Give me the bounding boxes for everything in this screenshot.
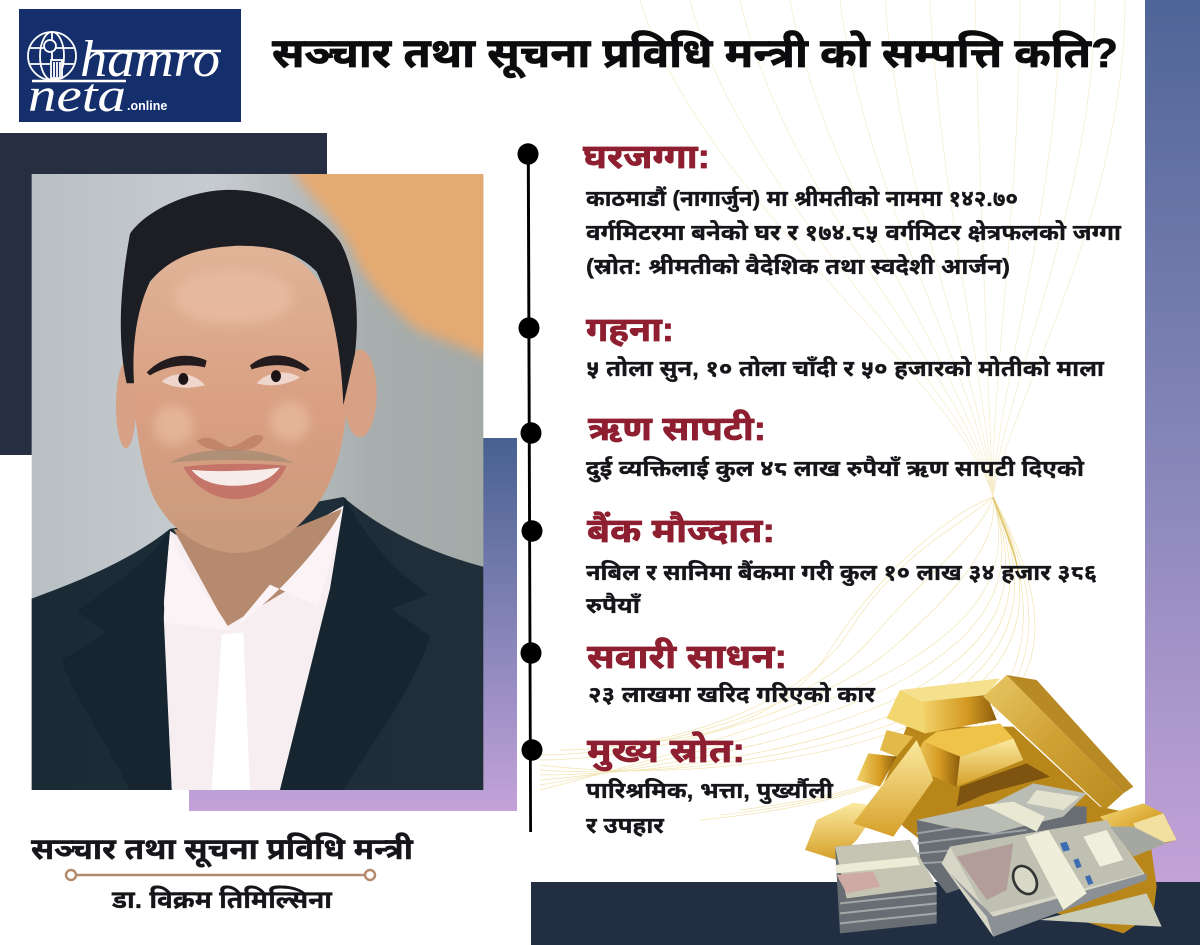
caption divider: [66, 870, 375, 880]
heading: बैंक मौज्दात:: [587, 511, 775, 550]
caption: minister name: डा. विक्रम तिमिल्सिना: [111, 885, 333, 914]
body line 2: रुपैयाँ: [586, 592, 642, 618]
panel: gradient block behind photo: [189, 438, 517, 811]
body line 2: वर्गमिटरमा बनेको घर र १७४.८५ वर्गमिटर क्षेत्रफलको जग्गा: [586, 220, 1122, 245]
lips: [183, 464, 287, 499]
collar: [163, 505, 345, 631]
heading: घरजग्गा:: [583, 138, 710, 176]
body line 1: काठमाडौं (नागार्जुन) मा श्रीमतीको नाममा १४२.७०: [586, 186, 1018, 212]
timeline dot 2: [518, 317, 540, 339]
gold: dark gap: [957, 763, 1050, 807]
logo word: neta: neta: [28, 69, 126, 122]
cash: loose note: [1040, 893, 1162, 927]
heading: सवारी साधन:: [587, 638, 787, 676]
eyebrows: [147, 356, 207, 375]
cash: rear stack: [917, 783, 1087, 893]
illustration: gold bars and cash: [805, 675, 1177, 937]
body line: ५ तोला सुन, १० तोला चाँदी र ५० हजारको मोतीको माला: [586, 356, 1105, 382]
panel: right gradient strip: [1145, 0, 1200, 882]
body line: २३ लाखमा खरिद गरिएको कार: [588, 682, 876, 707]
gold: lower left bar: [805, 803, 880, 860]
body line 2: र उपहार: [586, 813, 665, 838]
heading: मुख्य स्रोत:: [587, 732, 745, 772]
timeline dot 3: [520, 422, 542, 444]
cash: front stack: [942, 820, 1147, 937]
neck: [173, 509, 342, 627]
gold: slanted front bar: [853, 740, 933, 837]
section: jewellery: [586, 311, 1105, 382]
eyes: [162, 374, 205, 388]
cheek highlights: [153, 270, 310, 445]
teeth: [192, 467, 280, 486]
cash: left stack: [835, 840, 937, 933]
face: [132, 242, 347, 553]
decoration: gold line waves: [540, 0, 1125, 820]
icon: globe: [28, 32, 76, 80]
body line 1: पारिश्रमिक, भत्ता, पुर्ख्यौली: [586, 778, 834, 804]
gold: top left bar: [887, 678, 1000, 733]
lapels: [62, 529, 172, 790]
gold: middle bar: [910, 723, 1023, 787]
shirt placket: [212, 633, 250, 790]
section: vehicle: [587, 638, 876, 707]
logo word: hamro: hamro: [80, 31, 220, 88]
timeline dot 4: [522, 520, 542, 542]
title: सञ्चार तथा सूचना प्रविधि मन्त्री को सम्पत्ति कति?: [272, 30, 1118, 79]
panel: dark block behind photo: [0, 133, 327, 455]
panel: bottom dark bar: [531, 882, 1200, 945]
logo rules: [32, 51, 221, 81]
body line 1: नबिल र सानिमा बैंकमा गरी कुल १० लाख ३४ हजार ३८६: [586, 560, 1097, 586]
heading: गहना:: [586, 311, 674, 349]
gold: lower right bar: [1100, 803, 1177, 850]
body line 3: (स्रोत: श्रीमतीको वैदेशिक तथा स्वदेशी आर्जन): [586, 253, 1010, 279]
photo: minister portrait: [32, 174, 484, 790]
caption: minister role: सञ्चार तथा सूचना प्रविधि मन्त्री: [31, 832, 414, 868]
timeline dot 1: [518, 143, 538, 165]
shirt: [163, 505, 345, 790]
gold: long right bar: [983, 675, 1133, 810]
gold: short left bar: [857, 753, 897, 787]
ears: [116, 362, 136, 448]
logo: [19, 9, 241, 122]
timeline dot 5: [520, 642, 542, 664]
hair: [121, 190, 357, 405]
section: main source: [586, 732, 834, 838]
suit: [32, 497, 483, 790]
cash: loose note right: [1110, 827, 1167, 857]
logo background: [19, 9, 241, 122]
heading: ऋण सापटी:: [588, 410, 766, 448]
timeline dot 6: [522, 739, 542, 761]
logo suffix: .online: [127, 99, 167, 113]
section: loans: [586, 410, 1085, 483]
gold: filler behind pile: [880, 727, 1157, 933]
section: bank deposits: [586, 511, 1097, 618]
section: house and land: [583, 138, 1122, 279]
nose shadow: [197, 435, 263, 451]
timeline: [518, 143, 542, 832]
stubble: [170, 450, 293, 463]
body line: दुई व्यक्तिलाई कुल ४८ लाख रुपैयाँ ऋण सापटी दिएको: [586, 455, 1085, 483]
